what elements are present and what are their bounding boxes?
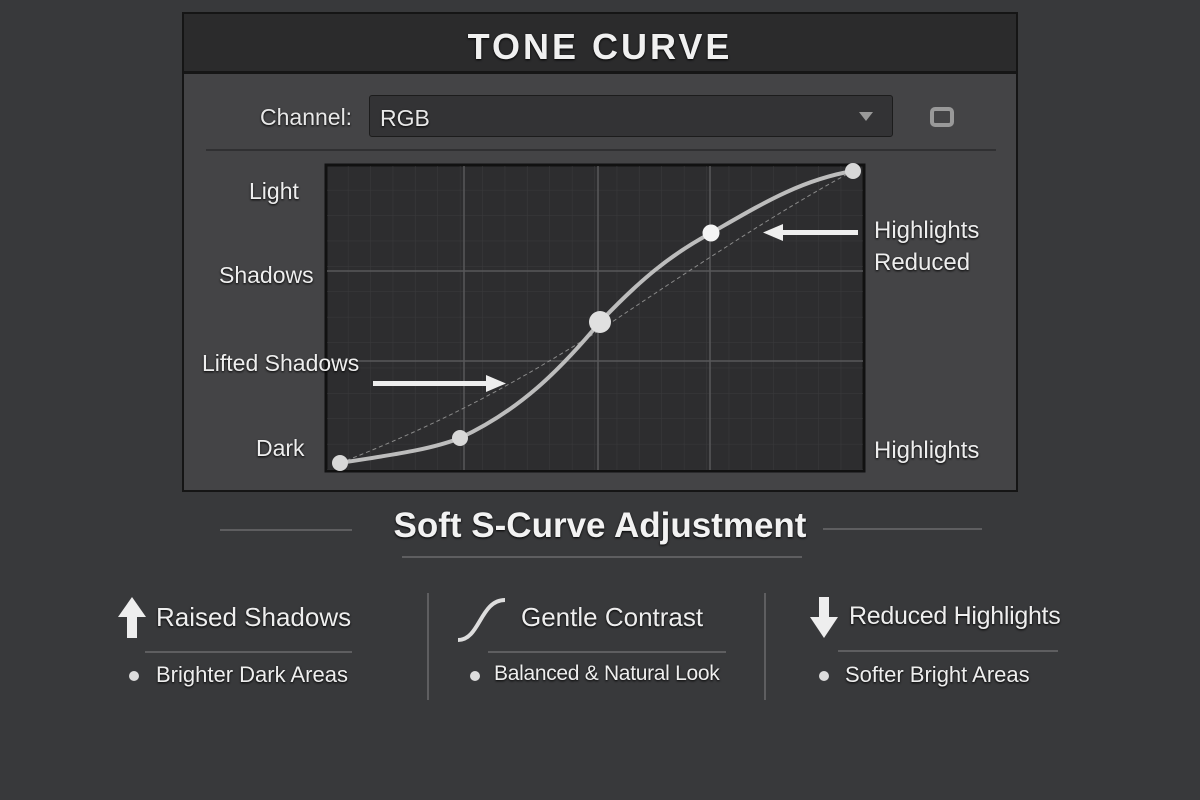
channel dropdown [369,95,893,137]
axis label: Shadows: Shadows [219,262,314,288]
channel dropdown: RGB [380,105,430,131]
label: Highlights: Highlights [874,437,979,464]
heading: Soft S-Curve Adjustment: Soft S-Curve Adjustment [394,506,806,545]
icon: up arrow [118,597,146,638]
axis label: Light: Light [249,178,299,204]
bullets [129,671,829,681]
label: Highlights Reduced: Reduced [874,249,970,276]
channel label: Channel: [260,104,352,130]
column: reduced highlights: Softer Bright Areas [845,662,1030,687]
column: gentle contrast: Gentle Contrast [521,602,703,632]
arrow: highlights reduced [763,224,858,241]
column: raised shadows: Brighter Dark Areas [156,662,348,687]
arrow: lifted shadows [373,375,506,392]
axis label: Dark: Dark [256,435,305,461]
column: reduced highlights: Reduced Highlights [849,602,1060,630]
section divider lines [145,529,1058,700]
icon: s-curve [458,600,505,640]
label: Highlights Reduced [874,217,980,276]
column: gentle contrast [494,602,720,685]
panel: tone curve [182,12,1018,492]
icon: down arrow [810,597,838,638]
column: raised shadows [156,602,352,688]
column: reduced highlights [845,602,1061,688]
title: TONE CURVE [468,26,732,67]
label: Highlights Reduced: Highlights [874,217,979,244]
curve [332,163,861,471]
label: Lifted Shadows: Lifted Shadows [202,350,359,376]
header bar [184,14,1016,74]
column: gentle contrast: Balanced & Natural Look [494,662,719,685]
dashed reference line [340,171,853,463]
column: raised shadows: Raised Shadows [156,602,351,632]
icon: reset [930,107,954,127]
